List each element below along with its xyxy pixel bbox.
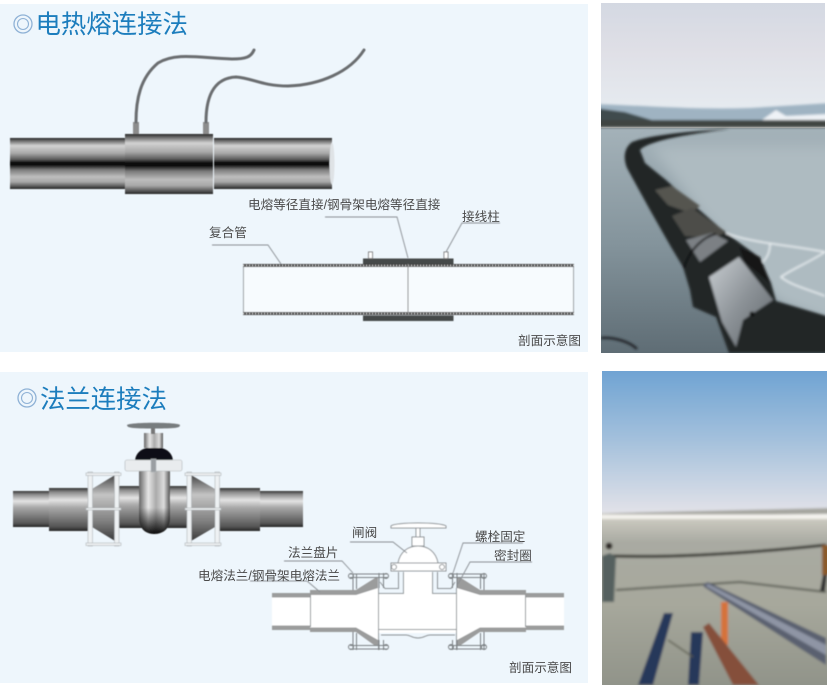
pipe walls xyxy=(272,578,564,645)
leader lines xyxy=(212,217,500,264)
title: flange: 法兰连接法 xyxy=(40,386,167,414)
photo: floating pipeline on water xyxy=(595,0,830,358)
photo: workers with pipe on the flats xyxy=(596,365,830,690)
label: composite pipe: 复合管 xyxy=(209,226,247,240)
label: main sleeve: 电熔等径直接/钢骨架电熔等径直接 xyxy=(248,197,441,212)
panel: electrofusion joint xyxy=(0,4,588,352)
title icon: double circle xyxy=(14,15,32,33)
illustration: flanged valve xyxy=(13,423,303,546)
stem xyxy=(144,425,163,448)
wires xyxy=(136,50,364,122)
pipe section xyxy=(243,264,574,314)
label: terminal: 接线柱 xyxy=(462,209,500,224)
right pipe segment xyxy=(214,138,332,189)
left pipe segment xyxy=(10,138,125,189)
terminal posts xyxy=(368,252,448,258)
section diagram: electrofusion xyxy=(212,217,574,321)
outer left pipes xyxy=(13,488,89,531)
outer right pipes xyxy=(219,488,303,531)
flange plates xyxy=(86,472,221,546)
label: valve: 闸阀 xyxy=(352,526,377,540)
label: section view: 剖面示意图 xyxy=(509,660,572,675)
label: bolts: 螺栓固定 xyxy=(475,530,526,544)
valve body outline xyxy=(310,572,526,650)
valve top outline xyxy=(391,523,446,571)
terminals xyxy=(133,122,209,134)
label: seal: 密封圈 xyxy=(494,548,532,563)
section diagram: flanged valve xyxy=(250,523,564,650)
title icon: double circle xyxy=(18,389,36,407)
label: electrofusion flange: 电熔法兰/钢骨架电熔法兰 xyxy=(198,569,340,583)
body flange xyxy=(125,459,182,472)
bolted flange left xyxy=(348,573,388,650)
sleeve section xyxy=(363,258,454,321)
valve body xyxy=(139,468,170,534)
bolted flange right xyxy=(448,573,486,650)
handwheel xyxy=(127,423,180,428)
illustration: pipe with electrofusion sleeve xyxy=(10,50,364,194)
inner pipe xyxy=(118,486,188,528)
bonnet xyxy=(135,447,173,462)
label: section view: 剖面示意图 xyxy=(518,333,581,348)
leader lines xyxy=(250,542,532,592)
title: electrofusion: 电热熔连接法 xyxy=(36,11,188,39)
valve body fill xyxy=(272,572,564,640)
fusion sleeve xyxy=(125,134,213,194)
panel: flange joint xyxy=(0,372,588,683)
cones xyxy=(92,475,215,541)
label: flange disc: 法兰盘片 xyxy=(288,545,338,560)
